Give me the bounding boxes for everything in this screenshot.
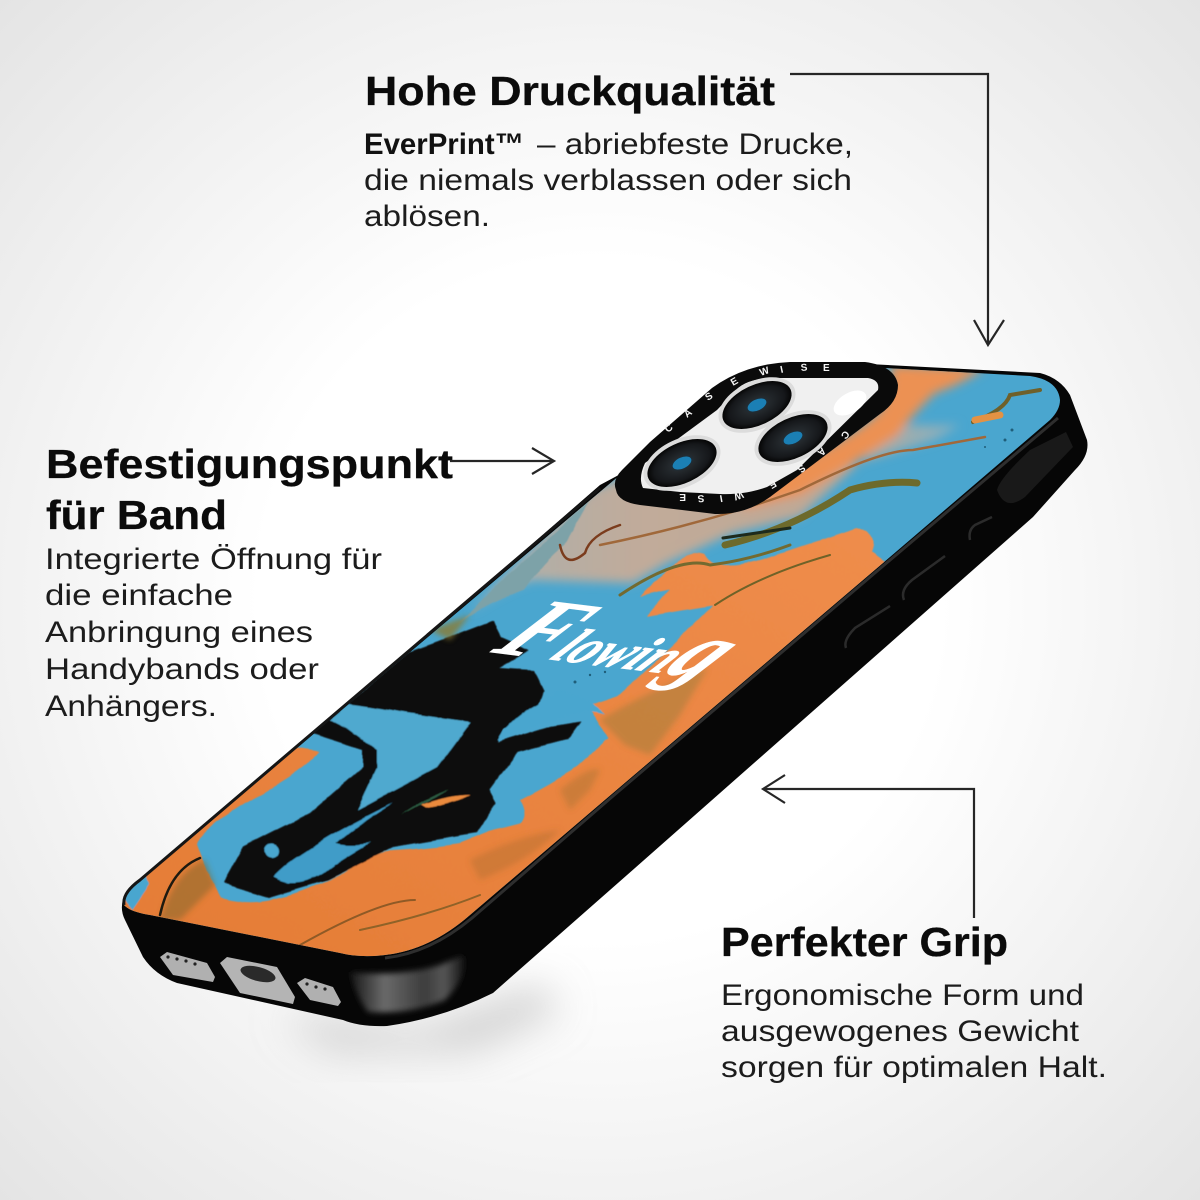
arrow: band attachment — [450, 448, 554, 474]
callout: grip — [721, 919, 1107, 1084]
paint speckles — [574, 428, 1014, 684]
grey-teal left wedge — [455, 500, 590, 625]
speaker right — [297, 978, 341, 1006]
body text: die einfache — [45, 579, 233, 612]
body text: Integrierte Öffnung für — [45, 543, 382, 576]
case body — [122, 362, 1088, 1026]
lens top — [710, 366, 804, 444]
body text: die niemals verblassen oder sich — [364, 164, 852, 197]
callout: band attachment — [45, 441, 453, 723]
callout: print quality — [364, 68, 853, 233]
speaker left — [160, 952, 215, 982]
screen edge line — [124, 488, 600, 905]
body text: ausgewogenes Gewicht — [721, 1015, 1080, 1048]
inner blue swirl — [273, 803, 393, 883]
body text — [364, 128, 853, 233]
rim highlight along screen edge — [385, 418, 1058, 958]
blue base — [124, 368, 1060, 956]
glass plate — [641, 378, 878, 494]
band attachment point — [997, 432, 1073, 503]
body text: Anbringung eines — [45, 616, 313, 649]
left blue edge patch — [126, 876, 150, 910]
lens right — [746, 399, 840, 477]
orange sliver — [420, 795, 470, 808]
heading — [46, 441, 453, 538]
body text: Anhängers. — [45, 690, 217, 723]
heading: Hohe Druckqualität — [365, 68, 775, 114]
olive streaks — [160, 390, 1040, 945]
heading: Perfekter Grip — [721, 919, 1008, 965]
phone shadow — [280, 985, 560, 1050]
body text: EverPrint™ — [364, 128, 524, 161]
body text: sorgen für optimalen Halt. — [721, 1051, 1107, 1084]
side buttons — [845, 517, 992, 648]
island frame — [615, 362, 898, 514]
lens left — [635, 424, 729, 502]
green sliver — [400, 790, 450, 816]
blended tan and orange upper band — [470, 365, 985, 612]
black blob — [223, 620, 580, 897]
camera island — [615, 362, 898, 514]
blue dot — [265, 844, 279, 858]
charging port — [220, 957, 295, 1004]
blue curl — [496, 702, 606, 742]
marble artwork — [124, 368, 1060, 956]
phone case illustration — [100, 340, 1100, 1026]
main orange — [118, 528, 890, 965]
island lettering upper: CASEWISE — [663, 362, 830, 435]
arrow: print quality — [790, 74, 1004, 345]
heading: für Band — [46, 492, 227, 538]
brand wordmark: Flowing — [470, 583, 776, 696]
body text: Handybands oder — [45, 653, 319, 686]
heading: Befestigungspunkt — [46, 441, 453, 487]
island lettering lower: CASEWISE — [679, 428, 851, 504]
body text — [721, 979, 1107, 1084]
olive blurred patches — [160, 615, 708, 920]
corner sheen — [350, 955, 465, 1012]
flash highlight — [829, 385, 871, 421]
body text: Ergonomische Form und — [721, 979, 1084, 1012]
arrow: grip — [763, 775, 974, 918]
body text: ablösen. — [364, 200, 490, 233]
body text: – abriebfeste Drucke, — [537, 128, 853, 161]
blue patch in black — [330, 704, 470, 810]
body text — [45, 543, 382, 723]
